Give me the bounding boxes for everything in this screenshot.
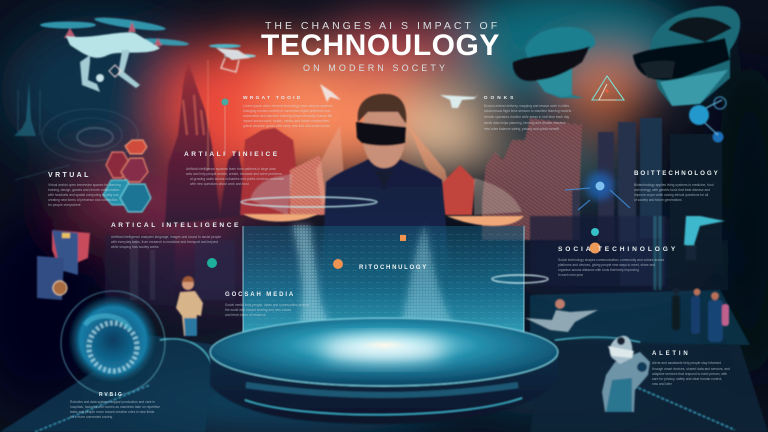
- label: vrtual: with headsets and spatial computing in daily use: [48, 193, 119, 197]
- label: artiali tiniesce: Artificial intelligence systems learn from patterns in large data: [186, 167, 276, 171]
- figure: person reaching: [684, 216, 725, 260]
- icon: tiny drone top: [320, 84, 341, 102]
- neck and face: [362, 108, 406, 168]
- headset figure left: [513, 27, 595, 98]
- label: wrgat tooid: Lorem ipsum dolor sit amet technology data network systems: [243, 104, 333, 108]
- presenter with VR goggles: [322, 94, 450, 276]
- label: aletin: ALETIN: [652, 351, 690, 357]
- label: artiali tiniesce: sets and help people decide, create, translate and solve problems: [186, 172, 282, 176]
- title block: THE CHANGES AI S IMPACT OF: [265, 20, 500, 32]
- label: donks: DONKS: [484, 95, 516, 101]
- label: artiali tiniesce: at growing scale across industries and public services worldwide: [190, 177, 284, 181]
- hair: [358, 94, 406, 124]
- label: boittechnology: [634, 170, 720, 202]
- circular base platform: [210, 318, 558, 424]
- label: socia technology: [558, 246, 678, 277]
- label: rvbig: for a more connected society: [70, 415, 113, 419]
- label: gocsah media: Social media links people, ideas and communities around: [225, 303, 309, 307]
- jacket: [322, 158, 450, 276]
- icon: drone by DONKS: [440, 95, 478, 108]
- label: vrtual: creating new forms of presence and connection: [48, 198, 117, 202]
- label: gocsah media: and fresh forms of influence: [225, 313, 266, 317]
- label: gocsah media: [225, 292, 309, 317]
- label: ritochnulogy: RITOCHNULOGY: [359, 265, 428, 271]
- label: gocsah media: the world with instant sharing and new voices: [225, 308, 292, 312]
- label: aletin: [652, 351, 730, 386]
- label: aletin: now and later: [652, 382, 673, 386]
- label: boittechnology: and energy, with genetic tools that treat disease and: [634, 188, 710, 192]
- label: aletin: adaptive services that respond to each person, with: [652, 372, 727, 376]
- label: donks: new rules balance safety, privacy and public benefit: [484, 127, 559, 131]
- road curves: [0, 335, 768, 432]
- left grid and radar hologram: [14, 82, 138, 180]
- icon: biotech molecule: [689, 97, 726, 142]
- label: socia technology: in each new year: [558, 273, 584, 277]
- label: artical intelligence: ARTICAL INTELLIGENCE: [111, 222, 241, 229]
- label: vrtual: VRTUAL: [48, 172, 91, 179]
- lower left night city: [105, 235, 235, 305]
- label: socia technology: platforms and devices, giving people new ways to meet, share and: [558, 263, 655, 267]
- label: boittechnology: of society and future generations: [634, 198, 682, 202]
- label: boittechnology: Biotechnology applies living systems to medicine, food: [634, 183, 714, 187]
- label: rvbig: [70, 392, 160, 419]
- icon: warning triangle hologram: [592, 76, 624, 100]
- label: aletin: through smart devices, shared data and sensors, and: [652, 367, 730, 371]
- label: donks: [484, 95, 572, 131]
- label: wrgat tooid: automation and machine learning shape everyday human life: [243, 114, 332, 118]
- cylinder top ring: [241, 174, 548, 283]
- title block: ON MODERN SOCETY: [303, 63, 448, 73]
- figure: group of people: [672, 288, 729, 342]
- label: socia technology: SOCIA TECHINOLOGY: [558, 246, 678, 253]
- label: wrgat tooid: impact across work, health, media, and future communities: [243, 119, 329, 123]
- label: artical intelligence: Artificial intelligence analyses language, images and sound to assist people: [111, 235, 221, 239]
- figure: seated robot with VR headset: [602, 336, 650, 412]
- label: boittechnology: improve crops while raising ethical questions for all: [634, 193, 708, 197]
- label: aletin: Alerts and assistants help people stay informed: [652, 361, 721, 365]
- label: donks: autonomous flight links sensors to machine learning models: [484, 109, 572, 113]
- glass cylinder hologram: [243, 225, 524, 370]
- goggles: [356, 122, 406, 146]
- label: artical intelligence: while shaping how society works: [111, 245, 159, 249]
- label: wrgat tooid: WRGAT TOOID: [243, 95, 302, 101]
- icon: swirling data orb: [61, 291, 165, 395]
- label: rvbig: tasks and people move toward creative roles in new fields: [70, 410, 155, 414]
- label: donks: remote operators monitor wide areas in real time each day: [484, 115, 570, 119]
- label: rvbig: hospitals, factories and homes as machines take on repetitive: [70, 405, 160, 409]
- label: socia technology: Social technology shapes communication, community and culture across: [558, 258, 664, 262]
- label: artiali tiniesce: [184, 151, 284, 186]
- icon: large drone: [40, 15, 189, 92]
- label: aletin: care for privacy, safety and clear human control,: [652, 377, 722, 381]
- label: boittechnology: BOITTECHNOLOGY: [634, 170, 720, 177]
- label: wrgat tooid: [243, 95, 333, 128]
- red spire tower: [165, 60, 250, 225]
- label: artical intelligence: [111, 222, 241, 249]
- label: wrgat tooid: global adoption grows with every new tool and smart device: [243, 124, 330, 128]
- icon: hexagon cluster: [103, 140, 151, 212]
- red buildings and coral cluster behind the presenter: [240, 125, 475, 215]
- label: artical intelligence: with everyday tasks, from research to medicine and transport and beyond: [111, 240, 218, 244]
- label: donks: Drones extend delivery, mapping and rescue work in cities: [484, 104, 569, 108]
- figure: reclining person: [525, 299, 598, 332]
- icon: stacked documents: [37, 230, 90, 300]
- label: vrtual: training, design, games and remote collaboration: [48, 188, 119, 192]
- label: wrgat tooid: changing modern society in connected digital platforms now: [243, 109, 331, 113]
- label: rvbig: RVBIG: [99, 392, 124, 398]
- icon: small drone: [209, 44, 256, 72]
- label: vrtual: [48, 172, 121, 207]
- label: vrtual: for people everywhere: [48, 203, 81, 207]
- label: artiali tiniesce: ARTIALI TINIEICE: [184, 151, 280, 158]
- headset figure right: [633, 6, 740, 106]
- label: artiali tiniesce: with new questions about work and trust: [190, 182, 249, 186]
- label: socia technology: organise across distance with tools that keep improving: [558, 268, 639, 272]
- label: rvbig: Robotics and data systems support production and care in: [70, 400, 155, 404]
- central right skyline: [482, 118, 722, 264]
- label: gocsah media: GOCSAH MEDIA: [225, 292, 295, 298]
- label: vrtual: Virtual worlds open immersive spaces for learning: [48, 183, 121, 187]
- title block: [261, 20, 500, 73]
- label: donks: aerial data helps planning, farming and climate research: [484, 121, 566, 125]
- title block: TECHNOULOGY: [261, 29, 500, 62]
- icon: blue glow network: [565, 172, 630, 210]
- small marker icons: [207, 98, 600, 268]
- lower right night city: [530, 216, 750, 345]
- platform central light glow: [322, 339, 446, 361]
- figure: woman with tablet: [176, 276, 203, 336]
